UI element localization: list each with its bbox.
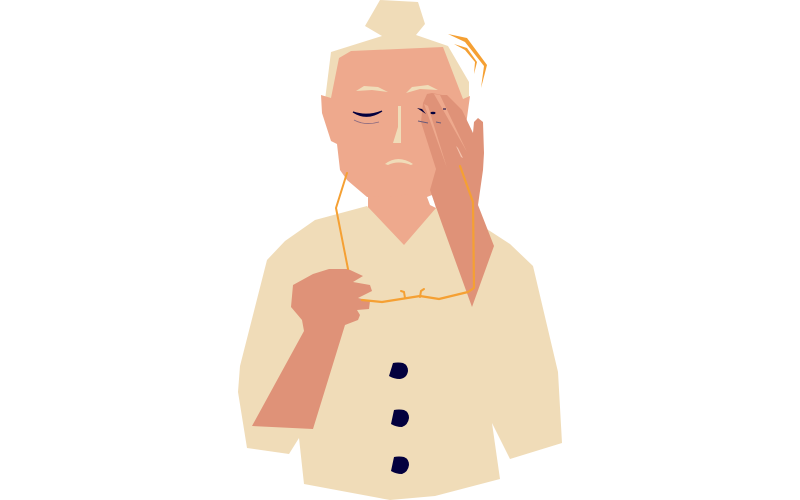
buttons bbox=[389, 362, 409, 474]
eye: right, seen through fingers bbox=[417, 108, 446, 114]
hair bbox=[325, 0, 469, 110]
right hand at eye and forearm bbox=[417, 93, 494, 307]
nose bbox=[393, 106, 401, 143]
eyebrow: left bbox=[356, 86, 388, 92]
glasses: orange frame and temple bbox=[336, 166, 474, 302]
neck bbox=[368, 170, 438, 250]
face bbox=[321, 47, 470, 197]
gap between neck and shoulder bbox=[427, 195, 436, 208]
gaps between fingers bbox=[424, 104, 447, 168]
left hand and forearm bbox=[252, 269, 372, 429]
mouth bbox=[385, 159, 413, 165]
eye: left closed bbox=[353, 111, 382, 116]
hair strands: orange motion marks bbox=[448, 34, 487, 88]
under-eye wrinkles, right bbox=[418, 121, 441, 123]
eyebrow: right bbox=[406, 85, 438, 93]
eye wrinkle bbox=[354, 120, 379, 124]
body: shirt bbox=[238, 206, 562, 500]
